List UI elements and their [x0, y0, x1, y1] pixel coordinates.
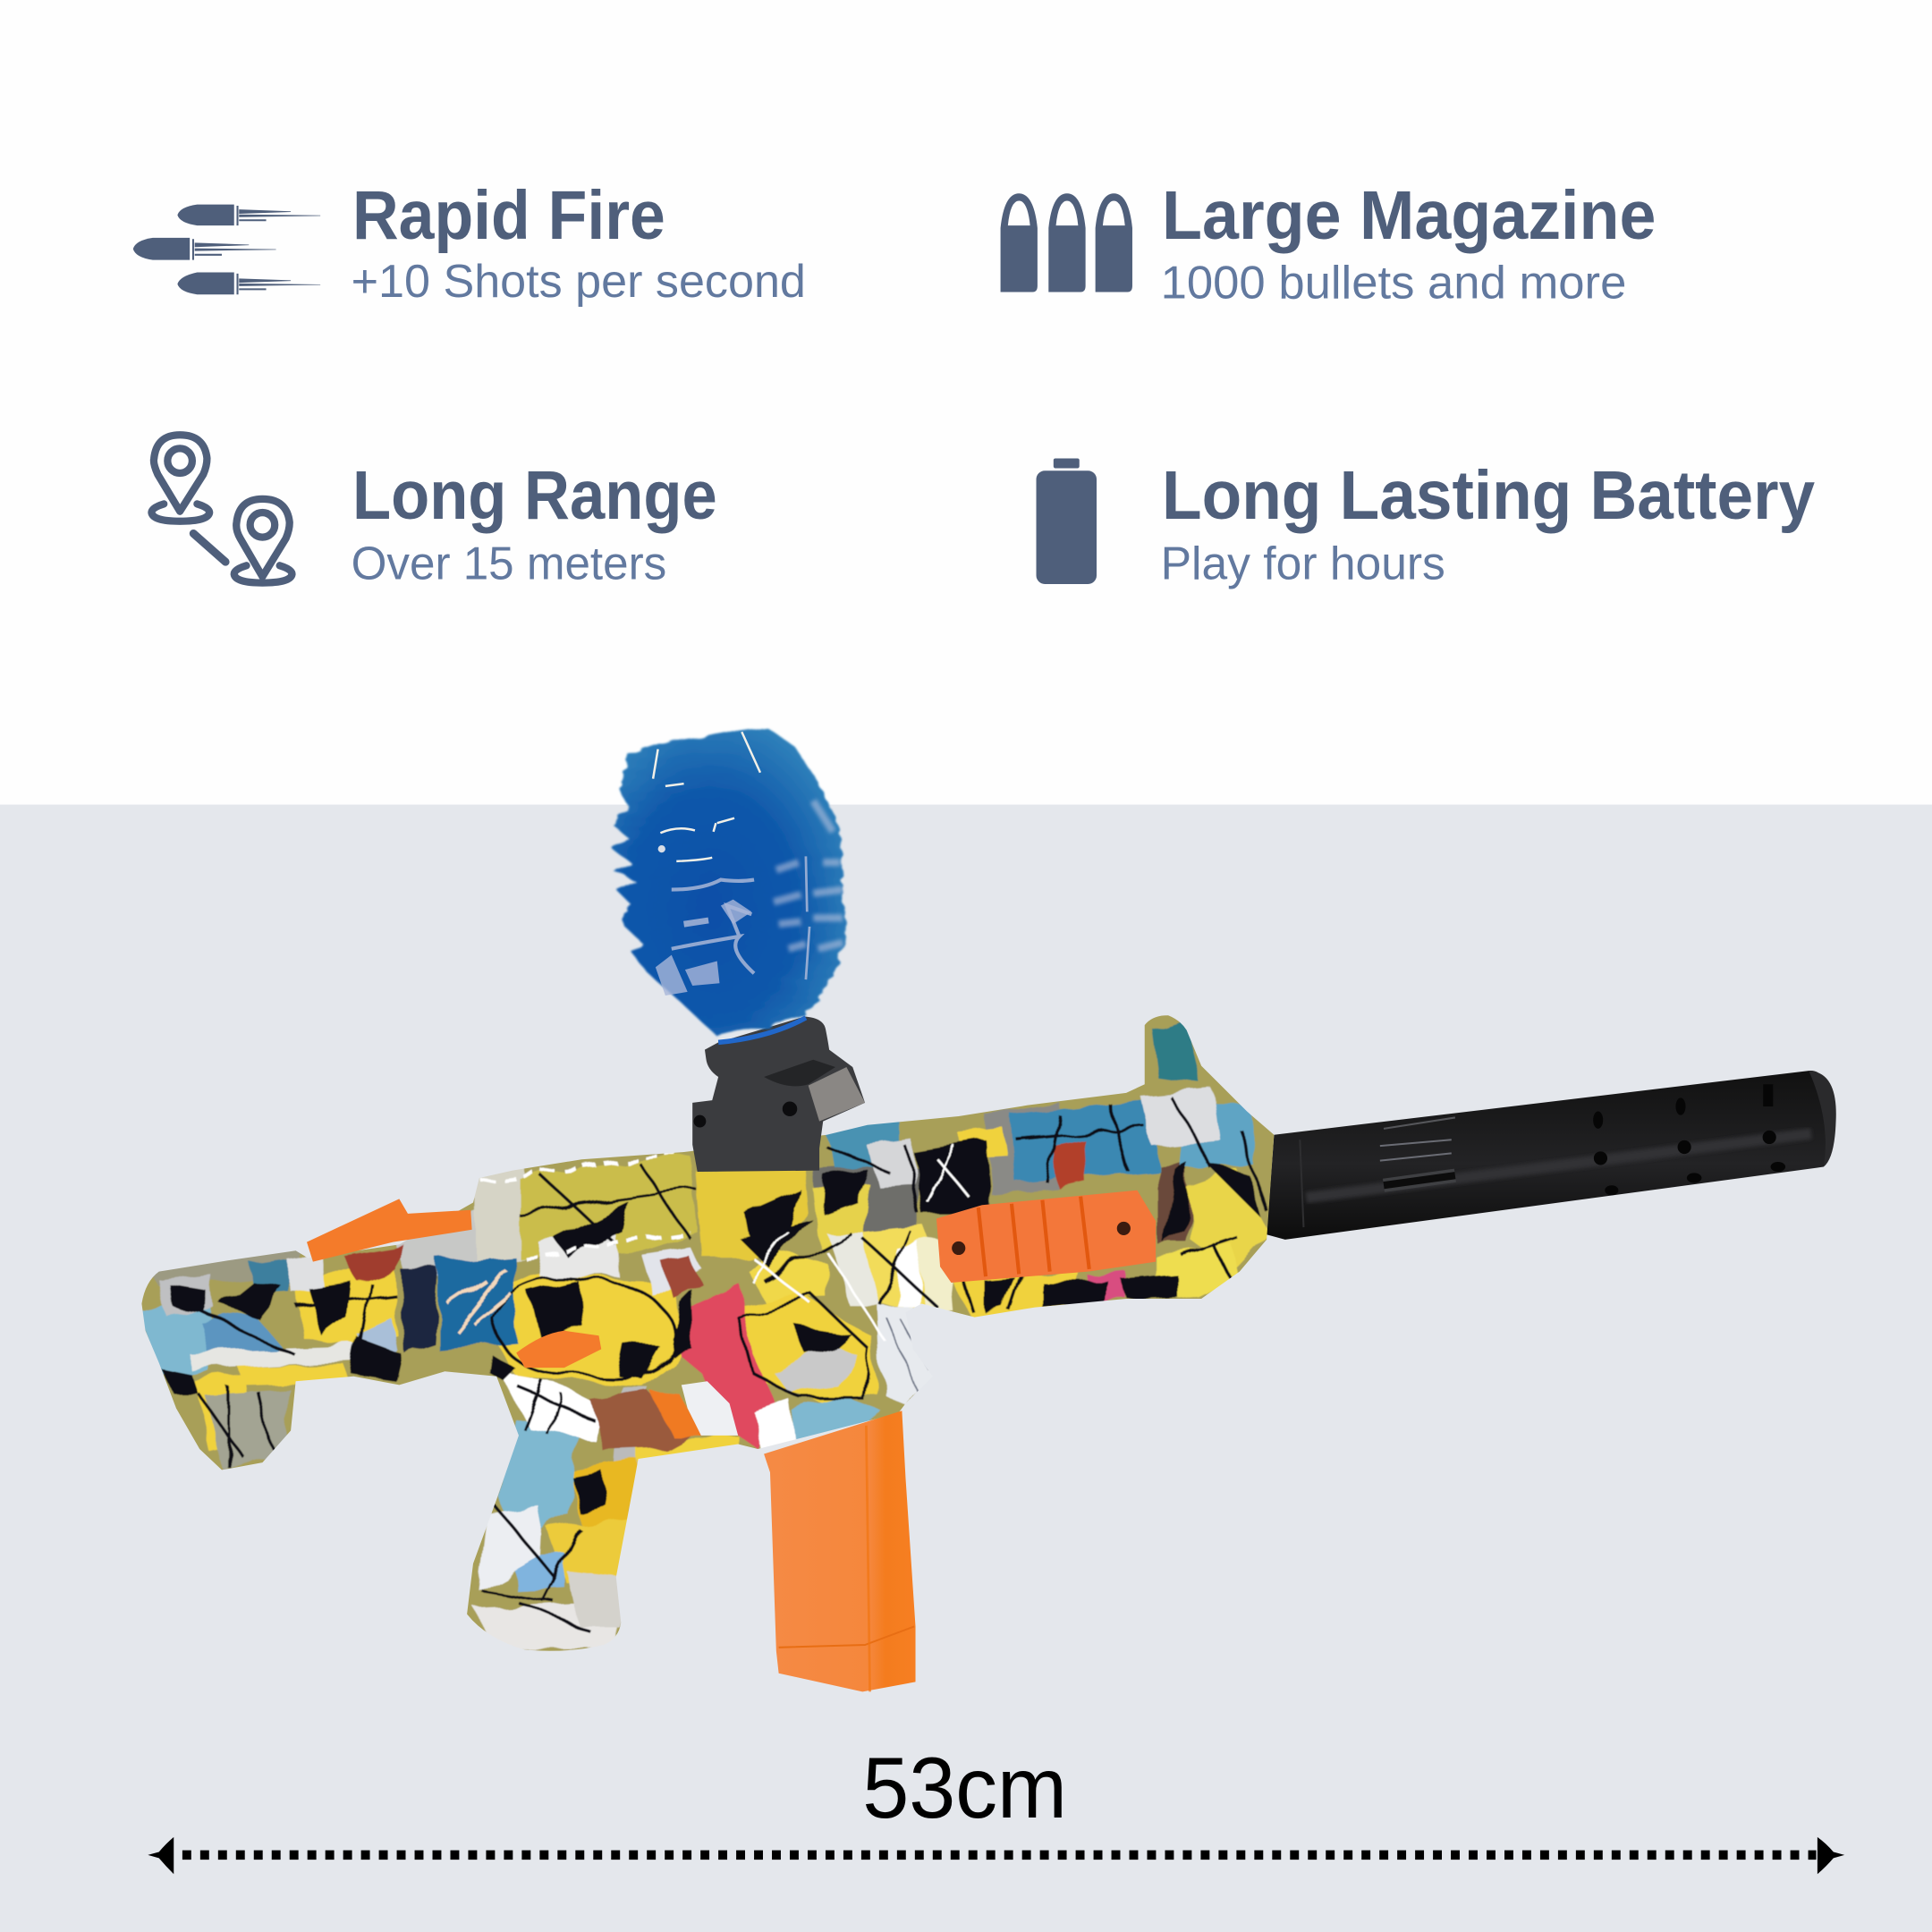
- orange magazine: [764, 1411, 916, 1691]
- gun barrel: [1267, 1071, 1836, 1240]
- text: over 15 meters: Over 15 meters: [352, 538, 666, 589]
- heading: long lasting battery: Long Lasting Battery: [1162, 457, 1815, 534]
- gel blaster toy gun: [123, 727, 1836, 1691]
- graffiti black ink shapes: [160, 1140, 1263, 1513]
- icon: three flying bullets: [133, 205, 320, 294]
- icon: two location pins: [151, 435, 292, 583]
- panel: white upper background: [0, 0, 1932, 806]
- blue water bead container: [613, 727, 846, 1042]
- feature: large magazine: [1001, 177, 1656, 309]
- trigger: [649, 1390, 702, 1436]
- length label 53cm: 53cm: [862, 1741, 1067, 1836]
- feature: long range: [151, 435, 717, 589]
- text: shots per second: +10 Shots per second: [352, 256, 806, 308]
- black hopper mount: [692, 1016, 865, 1172]
- heading: large magazine: Large Magazine: [1162, 177, 1656, 254]
- orange charging nub: [516, 1331, 601, 1368]
- length measurement: [148, 1741, 1844, 1874]
- text: bullets and more: 1000 bullets and more: [1161, 257, 1626, 309]
- icon: three bullets upright: [1001, 193, 1132, 292]
- heading: long range: Long Range: [352, 457, 717, 534]
- graffiti outline linework: [191, 1097, 1269, 1632]
- text: play for hours: Play for hours: [1161, 538, 1445, 589]
- gun body graffiti wrap: [123, 1011, 1306, 1664]
- left arrowhead: [148, 1837, 174, 1874]
- panel: grey lower background: [0, 805, 1932, 1932]
- orange handguard rail: [936, 1191, 1156, 1283]
- icon: battery: [1037, 458, 1097, 584]
- trigger guard opening: [682, 1381, 738, 1436]
- heading: rapid fire: Rapid Fire: [352, 177, 665, 254]
- right arrowhead: [1818, 1837, 1844, 1874]
- orange stock lever: [307, 1199, 472, 1262]
- dotted length line: [182, 1852, 1817, 1859]
- feature: rapid fire: [133, 177, 806, 308]
- feature: long lasting battery: [1037, 457, 1815, 589]
